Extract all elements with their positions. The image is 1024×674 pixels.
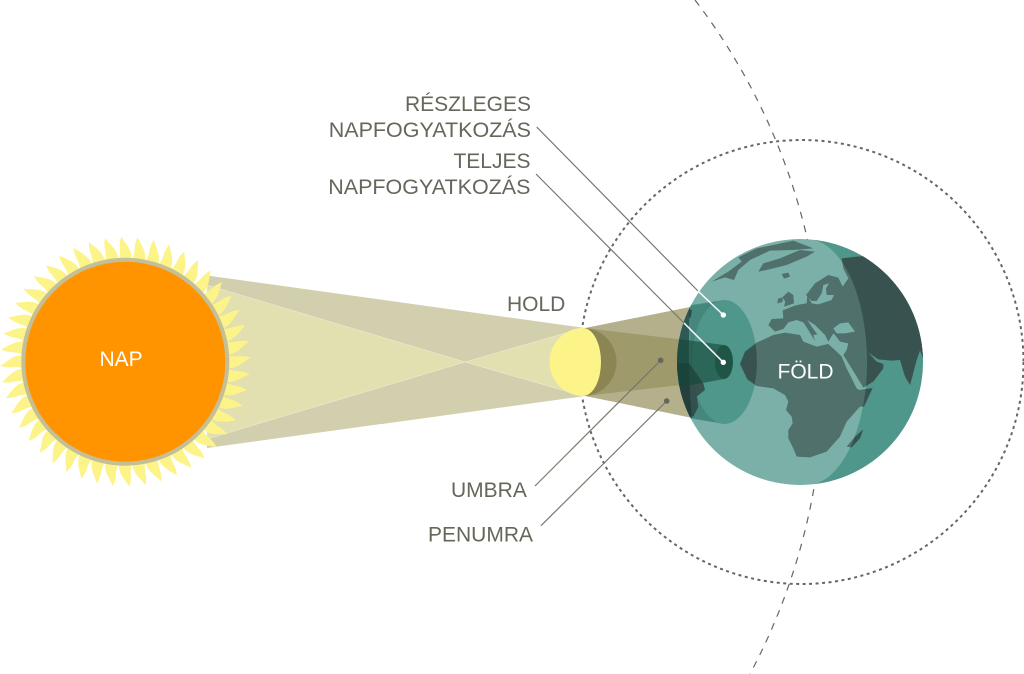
sunlight cones [207, 276, 585, 448]
earth [677, 239, 923, 485]
total eclipse cone [677, 339, 724, 387]
callout: partial eclipse [329, 93, 726, 318]
moon shaded side [583, 328, 616, 396]
dotted circle: moon orbit around earth [580, 140, 1024, 584]
sun disc [23, 260, 227, 464]
callout: partial eclipse: NAPFOGYATKOZÁS [329, 117, 531, 142]
earth label: FÖLD [778, 361, 834, 384]
total eclipse spot [715, 345, 733, 379]
moon [550, 328, 616, 396]
moon lit side [550, 328, 601, 396]
ocean [677, 239, 923, 485]
label: TELJES [453, 150, 530, 173]
leader line [537, 127, 698, 291]
black sea [833, 322, 855, 333]
umbra cone [585, 328, 690, 396]
sun [0, 237, 250, 487]
night side and partial eclipse zone [677, 240, 923, 484]
label: RÉSZLEGES [405, 93, 531, 116]
callout: umbra: UMBRA [451, 479, 527, 502]
left limb shadow [677, 307, 692, 418]
continents [673, 241, 940, 457]
sun label: NAP [100, 348, 143, 371]
callout: penumbra: PENUMRA [428, 524, 533, 547]
callout: umbra [451, 358, 664, 502]
dashed arc: moon orbit path [695, 0, 823, 674]
callout: total eclipse: NAPFOGYATKOZÁS [328, 174, 530, 199]
penumbra cone over earth [690, 300, 724, 424]
moon label: HOLD [507, 293, 565, 316]
callout: total eclipse [328, 150, 726, 365]
callout: penumbra [428, 398, 670, 547]
leader line [536, 174, 684, 323]
penumbra cone [585, 306, 695, 418]
sun rays [0, 237, 250, 487]
